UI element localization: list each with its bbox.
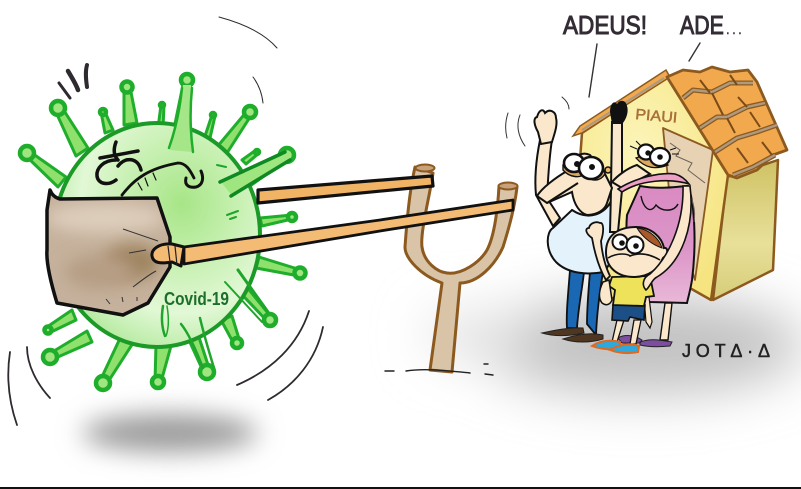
slingshot front band (152, 200, 513, 266)
woman nose (612, 165, 650, 188)
speech text ADEUS: ADEUS! (563, 10, 647, 40)
speech pointer lines (506, 43, 700, 146)
house (573, 67, 787, 300)
man face (537, 154, 612, 215)
Covid-19 label: Covid-19 (164, 289, 229, 309)
spike overlays on body (162, 85, 290, 368)
man eyes (564, 154, 603, 179)
woman face (612, 141, 689, 192)
PIAUI sign: PIAUI (635, 106, 678, 127)
speech text ADE: ADE... (680, 11, 744, 41)
roof left eave (573, 70, 670, 136)
man nose and head (537, 154, 612, 215)
soft shadow under virus (82, 414, 258, 452)
man waving hand (534, 110, 557, 144)
woman eyes (630, 141, 679, 166)
angry eyebrow and eye (97, 142, 141, 183)
virus spikes (25, 80, 301, 385)
motion lines around the virus (8, 17, 323, 425)
ground shadow under the family and house (425, 295, 801, 395)
roof tiles (667, 67, 787, 178)
child (586, 222, 667, 353)
woman raised hand (610, 101, 628, 124)
child shoes (592, 341, 639, 353)
child right arm (644, 297, 652, 328)
virus body (54, 123, 260, 347)
woman eyelids (636, 155, 668, 168)
child shirt (609, 276, 654, 306)
woman dress (626, 186, 695, 303)
slingshot back band (258, 176, 433, 203)
face mask (45, 188, 172, 317)
virus spike tips (20, 74, 306, 390)
house side wall (713, 160, 778, 300)
woman arm on child's shoulder (643, 186, 691, 290)
child hair (637, 228, 662, 248)
man raised arm (535, 140, 560, 226)
woman (610, 101, 705, 347)
woman hair waves (670, 143, 705, 222)
house door (663, 128, 713, 280)
artist signature: JOTΔ·Δ (682, 341, 770, 361)
man eyelids (563, 165, 605, 180)
man legs (567, 270, 603, 335)
child shorts (612, 305, 645, 321)
man vest (548, 203, 615, 273)
woman raised arm (610, 122, 622, 232)
man shoes (542, 328, 603, 342)
house front wall (580, 77, 728, 300)
slingshot fork (385, 164, 518, 375)
woman legs (660, 303, 672, 340)
child head (606, 227, 667, 277)
woman shoes (618, 336, 672, 347)
child mouth (608, 254, 660, 260)
child legs (612, 320, 641, 344)
child eyes (612, 234, 644, 254)
woman lips (618, 174, 689, 192)
child waving arm and hand (586, 222, 610, 280)
bottom border (0, 487, 801, 489)
man (534, 110, 615, 342)
frown on virus face (122, 163, 203, 195)
virus (20, 74, 306, 390)
